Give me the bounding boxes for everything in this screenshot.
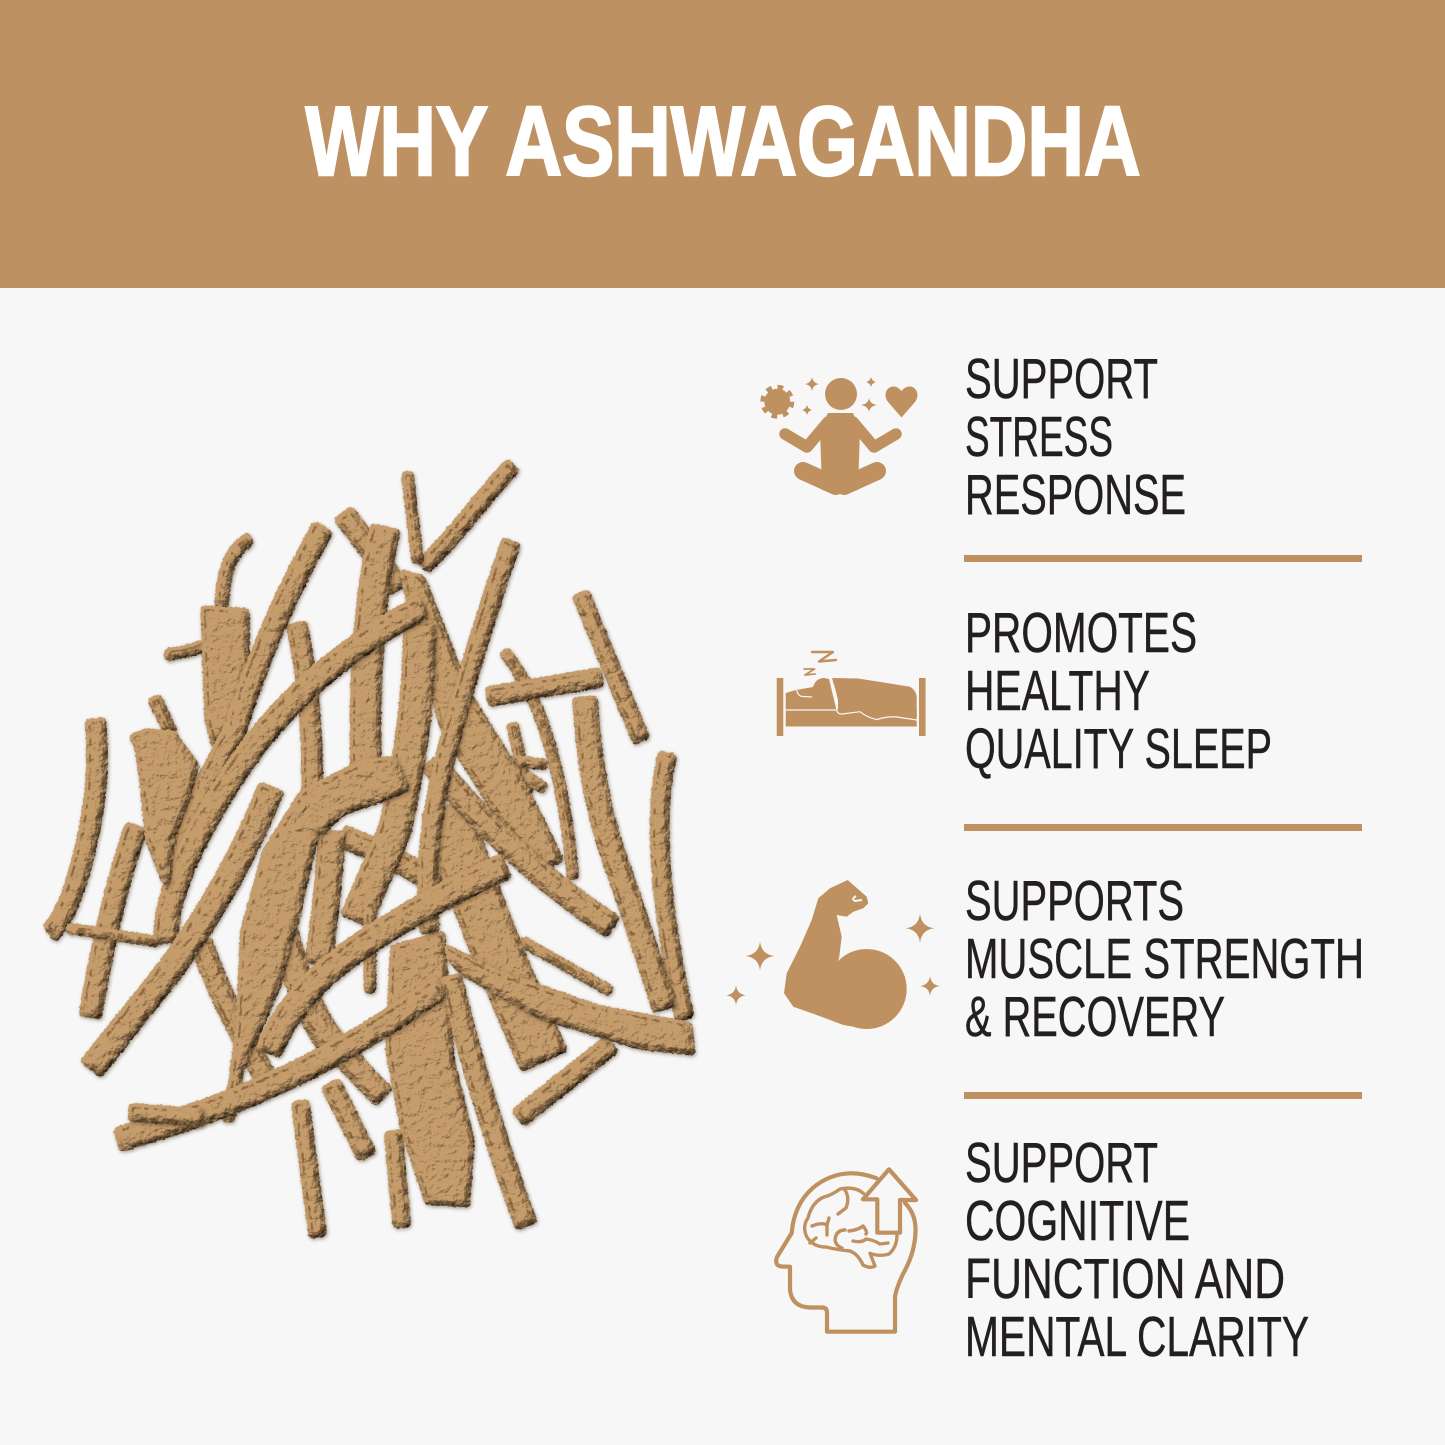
text: support stress response: RESPONSE: [965, 463, 1186, 527]
text: support stress response: STRESS: [965, 405, 1113, 469]
text: support cognitive function and mental clarity: [965, 1131, 1309, 1369]
text: promotes healthy quality sleep: [965, 601, 1272, 781]
text: promotes healthy quality sleep: HEALTHY: [965, 659, 1150, 723]
text: support cognitive function and mental clarity: COGNITIVE: [965, 1189, 1190, 1253]
text: supports muscle strength and recovery: SUPPORTS: [965, 869, 1184, 933]
icon: meditating person: [763, 377, 918, 490]
panel: benefits list: [726, 347, 1364, 1369]
benefit: stress response: [763, 347, 1186, 527]
icon: flexed arm with sparkles: [726, 880, 940, 1029]
text: support cognitive function and mental clarity: MENTAL CLARITY: [965, 1305, 1309, 1369]
header band: [0, 0, 1445, 288]
text: support stress response: [965, 347, 1186, 527]
icon: person sleeping in bed: [777, 652, 926, 736]
text: supports muscle strength and recovery: & RECOVERY: [965, 985, 1225, 1049]
illustration: ashwagandha roots pile: [48, 464, 696, 1238]
benefit: muscle: [726, 869, 1364, 1049]
text: support cognitive function and mental clarity: SUPPORT: [965, 1131, 1158, 1195]
title: WHY ASHWAGANDHA: [306, 86, 1140, 196]
icon: head with brain and up arrow: [776, 1169, 916, 1332]
text: support cognitive function and mental clarity: FUNCTION AND: [965, 1247, 1285, 1311]
text: support stress response: SUPPORT: [965, 347, 1158, 411]
benefit: cognitive function: [776, 1131, 1309, 1369]
text: promotes healthy quality sleep: PROMOTES: [965, 601, 1197, 665]
benefit: sleep: [777, 601, 1272, 781]
text: promotes healthy quality sleep: QUALITY SLEEP: [965, 717, 1272, 781]
text: supports muscle strength and recovery: [965, 869, 1364, 1049]
